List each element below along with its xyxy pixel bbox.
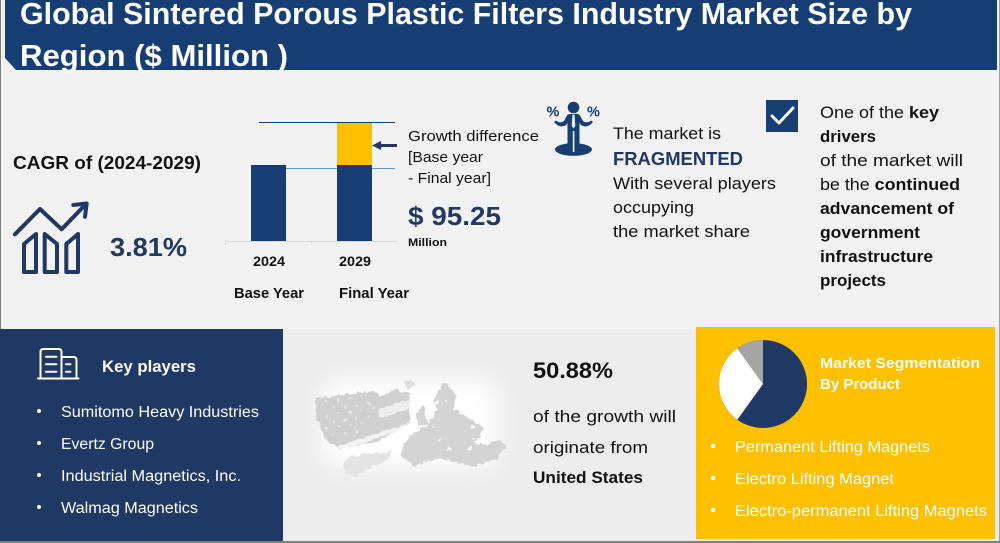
segment list: Permanent Lifting Magnets [735,439,930,456]
growth difference text: - Final year] [408,170,491,187]
panel: market segmentation: By Product [820,376,900,393]
icon: growth chart with arrow [15,204,87,272]
growth difference text: Growth difference [408,128,539,145]
segmentation heading: Market Segmentation [820,355,980,372]
player list [37,404,259,517]
segment list [711,439,987,520]
unit: Million [408,237,447,249]
share value: 50.88% [533,358,613,383]
icon: businessman balancing percentages: % [587,104,600,120]
CAGR heading: CAGR of (2024-2029) [13,153,201,173]
text block: key drivers [820,103,963,290]
label final year: Final Year [339,286,409,302]
map: flag-textured USA and Europe [315,380,507,477]
panel: market segmentation [696,327,995,539]
text block: market fragmentation: the market share [613,222,750,241]
label base year: Base Year [234,286,304,302]
growth difference text: [Base year [408,149,483,166]
fragmented highlight: FRAGMENTED [613,149,743,169]
key players heading: Key players [102,358,196,376]
header banner with title: Region ($ Million ) [20,38,288,73]
share description: originate from [533,438,648,457]
text block: key drivers: government [820,223,920,242]
CAGR value: 3.81% [110,232,187,262]
growth value: $ 95.25 [408,201,501,231]
bar chart: base year vs final year [225,122,409,302]
player list: Evertz Group [61,436,154,453]
text block: market fragmentation [613,124,776,241]
arrow: growth difference [372,141,397,150]
text block: market fragmentation: The market is [613,124,721,143]
icon: office buildings [38,349,78,378]
text block: key drivers: be the continued [820,175,960,194]
share description [533,407,676,487]
text block: key drivers: drivers [820,127,876,146]
bar: 2024 [251,165,286,241]
text block: market fragmentation: occupying [613,198,694,217]
player list: Walmag Magnetics [61,500,198,517]
bar: 2029 growth portion [337,123,372,165]
player list: Sumitomo Heavy Industries [61,404,259,421]
axis label 2024: 2024 [253,254,286,269]
player list: Industrial Magnetics, Inc. [61,468,241,485]
panel: key players [0,329,283,541]
panel: CAGR [13,153,201,272]
header banner with title [5,0,997,73]
text block: key drivers: of the market will [820,151,963,170]
growth difference text [408,128,539,249]
pie chart [719,340,807,428]
icon: businessman balancing percentages [546,102,600,156]
icon: check box [766,100,798,132]
segment list: Electro Lifting Magnet [735,471,895,488]
axis label 2029: 2029 [339,254,371,269]
bar: 2029 base portion [337,165,372,241]
text block: market fragmentation: With several players [613,174,776,193]
text block: key drivers: One of the key [820,103,940,122]
share description: United States [533,468,643,487]
icon: businessman balancing percentages: % [546,104,560,120]
text block: key drivers: infrastructure [820,247,933,266]
text block: key drivers: advancement of [820,199,954,218]
segment list: Electro-permanent Lifting Magnets [735,503,987,520]
panel: regional share [314,362,675,483]
text block: key drivers: projects [820,271,886,290]
share description: of the growth will [533,407,676,426]
